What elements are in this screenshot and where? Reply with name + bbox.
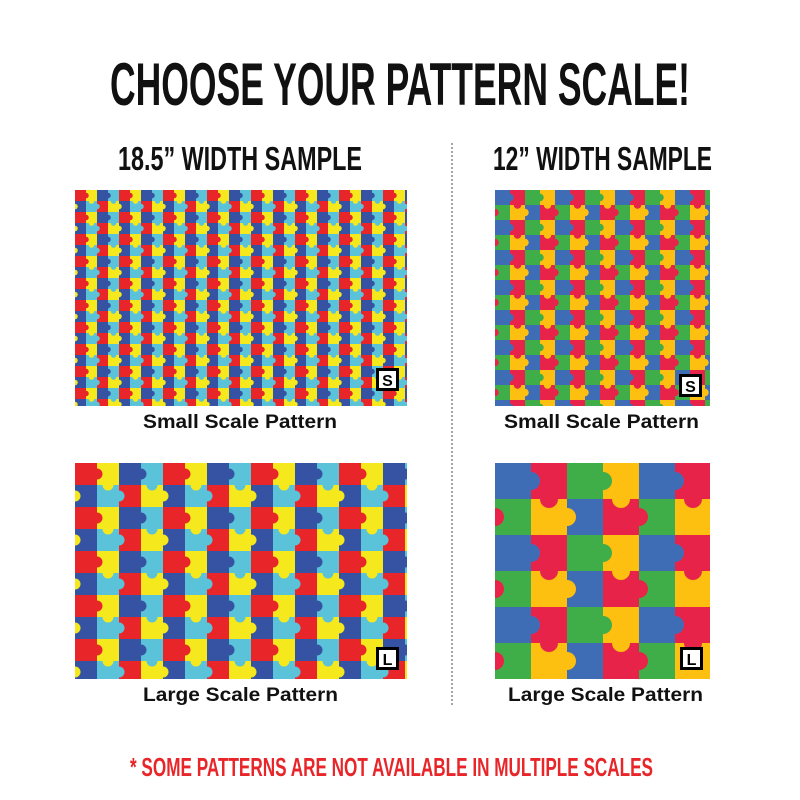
label: small right: Small Scale Pattern (504, 412, 699, 433)
badge L: L (383, 652, 393, 669)
badge S: S (382, 373, 393, 390)
label: small left: Small Scale Pattern (143, 412, 337, 433)
panel: 12 large (495, 463, 710, 679)
badge L: L (687, 652, 697, 669)
heading: 18.5 width: 18.5” WIDTH SAMPLE (118, 140, 362, 177)
panel: 18.5 large (75, 463, 407, 679)
label: large right: Large Scale Pattern (508, 685, 703, 706)
badge L (680, 647, 703, 670)
badge S: S (685, 379, 696, 396)
panel: 12 small (495, 190, 710, 406)
badge S (376, 368, 399, 391)
label: large left: Large Scale Pattern (143, 685, 338, 706)
panel: 18.5 small (75, 190, 407, 406)
badge S (679, 374, 702, 397)
badge L (376, 647, 399, 670)
